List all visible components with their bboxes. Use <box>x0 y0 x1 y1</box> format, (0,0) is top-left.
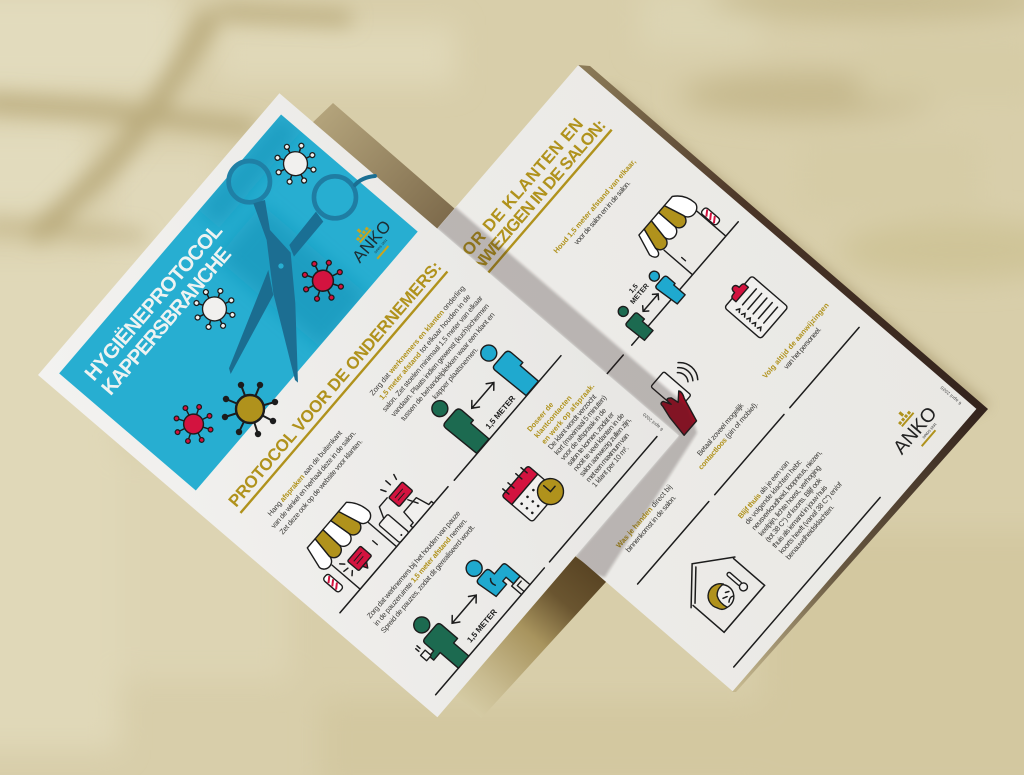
heading: clients and visitors: PROTOCOL VOOR DE KLANTEN EN <box>373 114 587 358</box>
icon: shop with two figures: METER <box>629 283 651 306</box>
logo: ANKO blue panel <box>342 211 399 270</box>
text: distance employees and clients: Zorg dat werknemers en klanten onderling <box>368 284 467 397</box>
text: contactless payment: contactloos (pin of mobiel). <box>696 400 760 471</box>
virus: gold large <box>222 382 278 437</box>
text: keep distance: Houd 1,5 meter afstand van elkaar, <box>551 157 638 255</box>
text: wash hands: Was je handen direct bij <box>614 482 674 550</box>
text: stay home: benauwdheidsklachten. <box>784 503 836 561</box>
text: hang agreements: Hang afspraken aan de buitenkant <box>266 429 344 518</box>
text: dose client contacts: De klant wordt verzocht <box>546 392 598 451</box>
icon: break room figures at 1.5 meter <box>387 526 544 695</box>
text: follow instructions: Volg altijd de aanwijzingen <box>760 301 831 380</box>
logo: ANKO blue panel: ANKO <box>349 217 395 266</box>
panel: left sheet, protocol for business owners <box>38 93 679 717</box>
shadow: soft glow along right sheet <box>600 85 990 420</box>
icon: shop with two figures <box>464 178 744 486</box>
text: distance employees and clients: vandaan. Plaats indien gewenst (kuch)schermen <box>389 302 491 418</box>
icon: contactless card and hand <box>641 355 721 435</box>
text: dose client contacts: voor de afspraak in de <box>558 406 608 462</box>
icon: shop with two figures: 1,5 <box>628 283 640 295</box>
text: stay home: koorts heeft (vanaf 38 C°) en/of <box>777 479 844 556</box>
text: dose client contacts <box>525 369 647 489</box>
text: distance employees and clients: salon. Zet stoelen minimaal 1,5 meter van elkaar <box>380 293 485 413</box>
icon: calendar and clock <box>499 457 569 527</box>
panel: right sheet, protocol for clients <box>334 65 976 691</box>
shadow: right sheet lower edge <box>732 409 988 692</box>
title: HYGIËNEPROTOCOL <box>80 219 227 385</box>
text: keep distance line 2: voor de salon en in de salon. <box>572 179 632 247</box>
icon: break room figures at 1.5 meter: 1,5 METER <box>465 607 499 644</box>
header panel: blue with scissors and viruses <box>59 114 422 494</box>
text: stay home <box>736 436 858 561</box>
icon: employee and client at 1.5 meter <box>405 313 561 480</box>
text: wash hands: binnenkomst in de salon. <box>624 493 678 554</box>
text: stay home: thuis als iemand in jouw huis <box>770 483 829 550</box>
text: dose client contacts: kort (maximaal 5 minuten) <box>552 393 608 457</box>
text: stay home: keelpijn, lichte hoest, verhoging <box>756 463 823 538</box>
text: dose client contacts: met een maximum van <box>584 431 631 484</box>
shadow: left sheet on the background, upper side <box>310 103 470 240</box>
icon: clipboard <box>719 271 788 339</box>
text: hang agreements: van de winkel en herhaal deze in de salon. <box>269 429 358 530</box>
icon: scissors <box>229 161 375 383</box>
icon: house with sick person <box>670 539 766 635</box>
text: dose client contacts: salon aanwezig zullen zijn, <box>577 416 633 478</box>
logo: ANKO blue panel: SINDS 1891 <box>374 238 388 254</box>
text: hang agreements: Zet deze ook op de website voor klanten. <box>278 437 364 536</box>
text: dose client contacts: Doseer de <box>525 400 555 433</box>
virus: white top <box>267 136 324 192</box>
text: follow instructions line 2: van het personeel. <box>782 325 823 371</box>
text: dose client contacts: klantcontacten <box>532 393 574 440</box>
date: right sheet: 6 april 2020 <box>939 385 962 406</box>
shadow: left sheet on the background, lower side <box>456 554 608 722</box>
heading: clients and visitors: AANWEZIGEN IN DE SALON: <box>454 116 610 292</box>
virus: red right <box>295 253 351 309</box>
text: distance employees and clients: 1,5 meter afstand tot elkaar houden in de <box>377 292 473 402</box>
divider: lower right <box>550 437 657 562</box>
text: distance employees and clients <box>365 280 508 433</box>
text: breaks: in de pauzeruimte 1,5 meter afstand nemen. <box>372 516 469 627</box>
text: contactless payment: Betaal zoveel mogelijk <box>695 401 746 458</box>
text: dose client contacts: salon te komen, zodat er <box>565 410 616 468</box>
text: stay home: (tot 38 C°) of koorts. Blijf ook <box>763 476 824 544</box>
text: breaks: Spreid de pauzes, zodat dit gerealiseerd wordt. <box>379 523 477 635</box>
virus: red lower <box>167 397 220 451</box>
text: dose client contacts: 1 klant per 10 m². <box>590 444 631 489</box>
icon: shop with devices <box>289 443 448 613</box>
date: left sheet: 6 april 2020 <box>641 412 664 432</box>
logo: ANKO right sheet: ANKO <box>889 403 942 459</box>
text: stay home: de volgende klachten hebt: <box>743 457 804 526</box>
text: dose client contacts: en werk op afspraak. <box>539 381 596 446</box>
shadow: left sheet on the right sheet <box>438 206 698 578</box>
text: stay home: Blijf thuis als je een van <box>736 458 791 520</box>
text: distance employees and clients: kapper plaatsnemen. <box>430 345 480 401</box>
shadow: right sheet top edge <box>578 65 988 410</box>
logo: ANKO right sheet <box>879 394 945 461</box>
dividers: middle row <box>638 327 955 667</box>
text: breaks: Zorg dat werknemers bij het houden van pauze <box>365 509 462 620</box>
heading: business owners: PROTOCOL VOOR DE ONDERNEMERS: <box>225 258 446 511</box>
virus: white middle <box>186 281 243 337</box>
text: stay home: neusverkoudheid, loopneus, niezen, <box>750 448 824 532</box>
icon: employee and client at 1.5 meter: 1,5 METER <box>484 394 517 431</box>
text: distance employees and clients: tussen de behandelplekken waar een klant en <box>399 310 497 423</box>
text: dose client contacts: nooit te veel klanten in de <box>571 411 626 473</box>
logo: ANKO right sheet: SINDS 1891 <box>922 422 938 440</box>
title: KAPPERSBRANCHE <box>97 243 236 400</box>
